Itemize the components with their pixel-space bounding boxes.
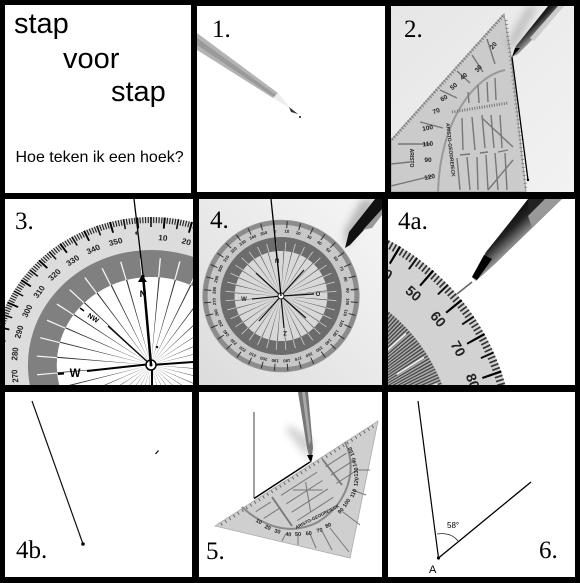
set square: 50 [295,532,301,538]
step number 4b: 4b. [16,537,47,564]
panel: step 2 [391,6,574,192]
protractor close-up: 330 [64,253,82,268]
protractor close-up: 320 [46,267,63,283]
set square: 120 [424,173,436,182]
heading: stap voor stap: stap [111,76,166,108]
protractor full circle: 340 [248,233,258,241]
south spoke [151,365,153,385]
set square: ARISTO [408,149,414,168]
cardinal spokes [252,270,314,328]
protractor full circle: 290 [213,275,220,283]
protractor full circle: 100 [345,298,351,306]
panel: step 6 [388,392,575,577]
panel: step 3 [5,199,193,385]
compass letters [241,259,321,335]
set square: 10 [254,518,263,526]
protractor full circle: 90 [345,288,350,293]
pencil shadow [508,6,538,52]
icon: pencil [345,199,382,248]
set square: 110 [422,141,434,148]
small marker [156,346,158,348]
protractor close-up: 300 [20,303,35,319]
protractor close-up: W [70,368,81,380]
protractor full circle: 180 [282,358,291,364]
compass letters: Z [283,329,287,335]
protractor full circle: 270 [211,297,217,305]
set square: 70 [432,107,441,116]
protractor full circle: 120 [338,319,345,328]
protractor full circle: 150 [314,345,324,354]
set square: 70 [316,527,323,535]
east spoke [151,362,193,365]
protractor zoomed edge: 60 [427,308,450,330]
protractor full circle: 130 [331,329,340,338]
protractor zoomed edge: 40 [374,261,396,283]
icon: pencil [472,199,562,281]
drawn line [271,199,281,296]
protractor zoomed edge: 70 [448,338,469,359]
step number 5: 5. [206,538,225,565]
protractor full circle: 320 [229,245,238,254]
protractor full circle: 200 [259,355,268,362]
step number 4: 4. [210,207,229,234]
protractor zoomed edge: 80 [463,371,483,391]
set square [215,421,396,558]
angle label: 58° [447,521,459,530]
hub [146,360,156,370]
protractor full circle: 170 [294,355,302,362]
protractor close-up: 310 [32,284,47,300]
step number 4a: 4a. [398,208,428,235]
vertical drawn line [253,412,255,498]
protractor full circle: 250 [216,319,224,328]
panel: step 4a [342,199,575,391]
icon: pencil at point [197,33,301,118]
protractor full circle: 240 [222,328,230,338]
drawn tick mark [457,282,472,294]
protractor full circle: 210 [248,351,257,359]
line along set square [254,462,310,498]
set square: 50 [449,82,459,92]
drawn line with north marker: N [140,289,147,300]
set square: 130 [354,467,360,477]
protractor full circle: 190 [271,358,279,363]
set square: 60 [305,531,312,537]
point [527,179,529,181]
protractor full circle [196,214,366,378]
protractor full circle: 20 [295,230,302,236]
protractor full circle: 0 [274,229,277,234]
NW spoke [108,326,151,365]
set square: 20 [263,524,271,532]
text: question: Hoe teken ik een hoek? [16,149,184,166]
panel: step 4 [199,199,382,385]
protractor close-up: 20 [181,237,192,247]
protractor full circle: 40 [316,239,323,246]
heading: stap voor stap: stap [14,8,69,40]
point [81,542,85,546]
west spoke [87,364,151,371]
protractor close-up: 280 [10,347,20,361]
protractor full circle: 10 [284,229,290,234]
set square: 30 [474,64,484,74]
protractor close-up [0,205,323,525]
set square: 100 [422,124,434,133]
set square: 60 [439,94,449,104]
protractor full circle: 80 [343,276,349,283]
angle drawing [418,401,531,560]
protractor full circle: 230 [229,337,238,346]
set square: 120 [353,477,361,487]
protractor full circle: 60 [332,255,340,263]
set square: 150 [348,446,356,457]
compass letters: W [241,297,247,303]
panel: step 4b [5,392,192,577]
heading: stap voor stap: voor [63,43,120,75]
step number 3: 3. [15,208,34,235]
protractor full circle: 110 [342,309,349,317]
panel: title [5,5,191,193]
protractor full circle: 220 [238,345,247,353]
protractor full circle: 140 [324,338,333,347]
protractor close-up: 290 [13,324,26,339]
step number 1: 1. [212,16,231,43]
set square: 20 [489,41,499,51]
compass letters: O [316,292,321,298]
set square: 30 [274,528,281,536]
drawn line [32,401,83,544]
panel: step 5 [199,392,382,577]
protractor zoomed edge: 30 [342,246,363,267]
protractor zoomed edge [278,217,518,493]
marked tick [156,450,158,454]
protractor full circle: 280 [211,286,217,294]
drawn line [512,57,528,180]
set square: ARISTO-GEODREIECK [444,123,456,177]
hub [278,293,284,299]
protractor full circle: 260 [213,308,220,317]
set square: 40 [285,532,292,538]
step number 2: 2. [404,16,423,43]
panel: step 1 [197,6,385,192]
set square: 80 [325,522,333,530]
set square [391,14,526,192]
step number 6: 6. [539,537,558,564]
protractor full circle: 310 [222,254,231,263]
protractor close-up: NW [86,313,100,325]
set square: 100 [342,498,352,509]
pencil shadow [286,425,312,460]
compass letters: N [275,259,279,265]
protractor full circle: 330 [238,238,248,247]
protractor full circle: 300 [217,264,224,273]
drawn line with north marker [134,199,151,365]
set square: 90 [424,157,432,164]
protractor full circle: 50 [325,247,332,254]
set square: ARISTO-GEODREIECK [295,503,341,530]
protractor full circle: 350 [260,230,268,237]
protractor close-up: 10 [158,233,168,243]
set square: 90 [337,507,346,516]
protractor full circle: 70 [338,265,345,272]
heading: stap voor stap [14,8,166,108]
set square: 140 [351,457,359,467]
set square: 40 [459,72,469,82]
protractor close-up: 270 [10,369,20,383]
protractor close-up: 340 [85,243,102,256]
protractor full circle: 160 [304,351,314,359]
protractor full circle: 30 [306,234,313,241]
pencil shadow [345,199,378,248]
set square: 110 [349,488,359,499]
protractor close-up: 350 [108,236,124,248]
icon: pencil [298,392,313,463]
protractor zoomed edge: 50 [402,282,425,305]
point label A: A [429,564,437,576]
icon: pencil [512,6,564,57]
